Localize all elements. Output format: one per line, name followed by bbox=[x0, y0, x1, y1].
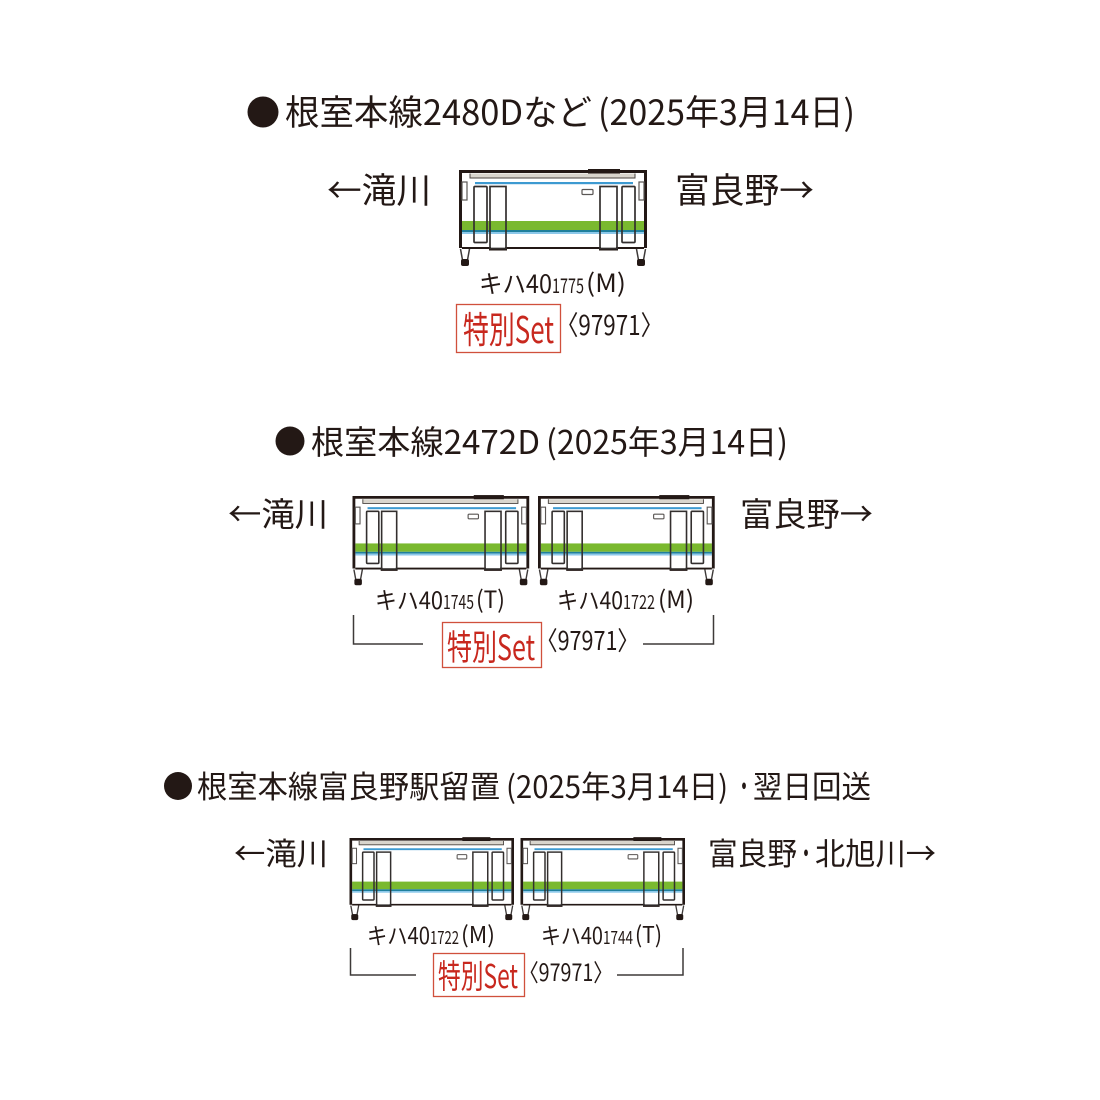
direction label: 富良野・北旭川 bbox=[708, 829, 936, 874]
car label: キハ40 1745 (T): (T) bbox=[476, 580, 505, 615]
set badge: 特別Set: 特別Set bbox=[463, 300, 554, 354]
heading: 富良野駅留置・翌日回送: ・ bbox=[735, 762, 753, 807]
car label: キハ40 1775 (M) bbox=[479, 264, 626, 301]
heading: 根室本線2472D: 根室本線2472D bbox=[311, 416, 540, 464]
car label: キハ40 1722 (M): 1722 bbox=[430, 924, 459, 950]
train car: キハ40 1775 bbox=[460, 169, 646, 266]
heading: 根室本線2472D: (2025年3月14日) bbox=[546, 416, 788, 464]
car label: キハ40 1722 (M): キハ40 bbox=[557, 581, 623, 616]
direction label: 富良野: 富良野→ bbox=[740, 488, 873, 536]
direction label: 滝川: ←滝川 bbox=[234, 829, 328, 874]
heading: 根室本線2472D bbox=[276, 416, 788, 464]
car label: キハ40 1745 (T): 1745 bbox=[443, 588, 474, 615]
set bracket bbox=[350, 948, 683, 975]
car label: キハ40 1775 (M): (M) bbox=[586, 264, 626, 300]
product number: 〈97971〉 bbox=[556, 304, 663, 343]
heading: 根室本線2480Dなど bbox=[248, 85, 855, 136]
direction label: 富良野: 富良野→ bbox=[675, 163, 814, 214]
car label: キハ40 1722 (M): 1722 bbox=[623, 588, 655, 615]
product number: 〈97971〉 bbox=[519, 953, 613, 988]
train car: キハ40 1744 bbox=[522, 837, 684, 920]
set badge: 特別Set: 特別Set bbox=[447, 620, 535, 671]
car label: キハ40 1745 (T): キハ40 bbox=[375, 581, 443, 616]
car label: キハ40 1744 (T) bbox=[541, 916, 662, 951]
section 2: 根室本線2472D bbox=[228, 416, 873, 671]
car label: キハ40 1722 (M) bbox=[557, 580, 694, 616]
direction label: 滝川: ←滝川 bbox=[228, 488, 328, 536]
train car: キハ40 1745 bbox=[354, 495, 528, 585]
car label: キハ40 1722 (M): (M) bbox=[658, 580, 694, 615]
section 3: 富良野駅留置 bbox=[164, 762, 936, 998]
heading: 富良野駅留置・翌日回送: 根室本線富良野駅留置 bbox=[197, 762, 500, 807]
train car: キハ40 1722 bbox=[539, 495, 713, 585]
heading: 富良野駅留置・翌日回送: 翌日回送 bbox=[753, 762, 871, 807]
set badge: 特別Set: 特別Set bbox=[438, 950, 518, 998]
car label: キハ40 1775 (M): キハ40 bbox=[479, 265, 552, 301]
direction label: 滝川: ←滝川 bbox=[327, 163, 431, 214]
heading: 根室本線2480Dなど: (2025年3月14日) bbox=[598, 85, 855, 136]
train car: キハ40 1722 bbox=[351, 837, 513, 920]
direction label: 富良野・北旭川: 北旭川→ bbox=[815, 829, 936, 874]
product number: 〈97971〉 bbox=[536, 621, 639, 658]
car label: キハ40 1745 (T) bbox=[375, 580, 505, 616]
car label: キハ40 1775 (M): 1775 bbox=[552, 270, 584, 299]
heading: 根室本線2480Dなど: 根室本線2480Dなど bbox=[285, 85, 592, 136]
car label: キハ40 1744 (T): (T) bbox=[635, 916, 662, 950]
direction label: 富良野・北旭川: ・ bbox=[797, 829, 815, 874]
set bracket bbox=[354, 615, 714, 644]
car label: キハ40 1722 (M) bbox=[367, 916, 495, 951]
direction label: 富良野・北旭川: 富良野 bbox=[708, 829, 797, 874]
heading: 富良野駅留置・翌日回送 bbox=[164, 762, 871, 807]
car label: キハ40 1722 (M): (M) bbox=[461, 916, 495, 950]
car label: キハ40 1744 (T): キハ40 bbox=[541, 917, 603, 951]
heading: 富良野駅留置・翌日回送: (2025年3月14日) bbox=[506, 762, 728, 807]
section 1: 根室本線2480D bbox=[248, 85, 855, 354]
car label: キハ40 1722 (M): キハ40 bbox=[367, 917, 430, 951]
car label: キハ40 1744 (T): 1744 bbox=[603, 924, 633, 950]
